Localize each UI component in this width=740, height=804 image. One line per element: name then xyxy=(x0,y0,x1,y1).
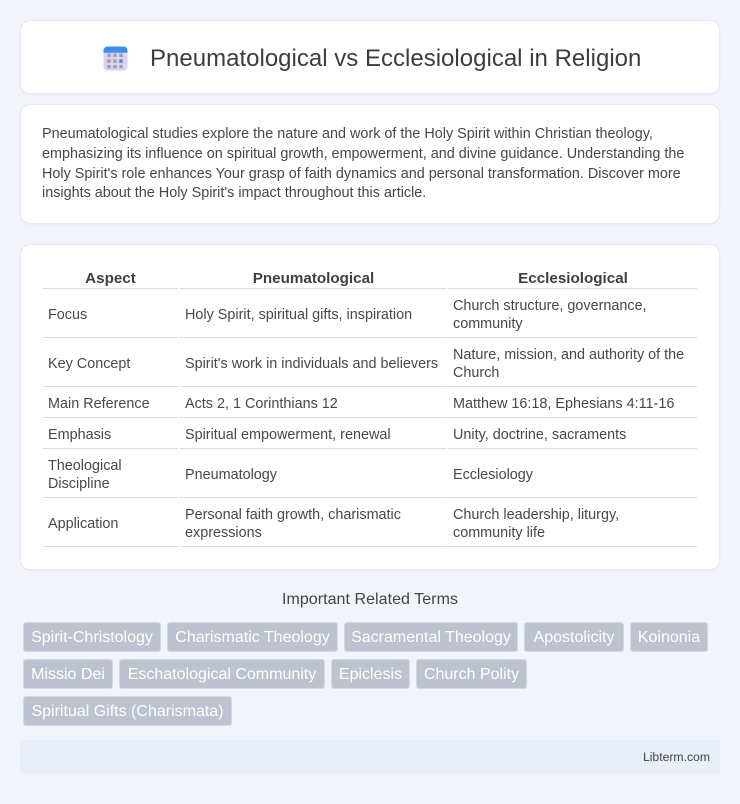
row: key concept: Nature, mission, and authority of the xyxy=(453,346,684,362)
row: application: community life xyxy=(453,525,545,541)
related terms tags: Spirit-Christology xyxy=(31,629,153,646)
row: emphasis: Emphasis xyxy=(48,426,111,442)
related terms heading: Important Related Terms xyxy=(282,591,458,608)
related terms tags: Charismatic Theology xyxy=(175,629,330,646)
row: focus: community xyxy=(453,316,523,332)
row: main reference: Acts 2, 1 Corinthians 12 xyxy=(185,396,338,412)
related terms tags xyxy=(23,622,708,726)
table header xyxy=(85,270,628,287)
related terms tags: Spiritual Gifts (Charismata) xyxy=(31,703,224,720)
row: emphasis: Spiritual empowerment, renewal xyxy=(185,426,391,442)
header panel xyxy=(20,20,720,94)
related terms tags: Epiclesis xyxy=(339,666,402,683)
row: main reference xyxy=(48,396,674,412)
row: main reference: Main Reference xyxy=(48,396,150,412)
table header: Ecclesiological xyxy=(518,270,628,287)
related terms tags: Koinonia xyxy=(638,629,700,646)
icon: calendar xyxy=(104,46,128,70)
panel: introduction xyxy=(20,104,720,224)
related terms tags: Eschatological Community xyxy=(128,666,316,683)
related terms tags: Missio Dei xyxy=(31,666,105,683)
row: emphasis xyxy=(48,426,626,442)
related terms tags: Church Polity xyxy=(424,666,519,683)
intro text: Pneumatological studies explore the nature and work of the Holy Spirit within Christian theology, xyxy=(42,126,653,142)
row: main reference: Matthew 16:18, Ephesians 4:11-16 xyxy=(453,396,674,412)
row: application: expressions xyxy=(185,525,262,541)
row: key concept: Key Concept xyxy=(48,356,130,372)
row: theological discipline: Discipline xyxy=(48,476,110,492)
title: Pneumatological vs Ecclesiological in Religion xyxy=(150,45,641,72)
footer credit: Libterm.com xyxy=(643,750,710,764)
table header: Pneumatological xyxy=(253,270,374,287)
intro text: Holy Spirit's role enhances Your grasp of faith dynamics and personal transformation. Discover more xyxy=(42,166,681,182)
intro text: emphasizing its influence on spiritual growth, empowerment, and divine guidance. Understanding the xyxy=(42,146,684,162)
row: application xyxy=(48,506,619,541)
row: theological discipline: Theological xyxy=(48,458,122,474)
row: application: Application xyxy=(48,516,118,532)
row: application: Church leadership, liturgy, xyxy=(453,506,619,522)
row: application: Personal faith growth, charismatic xyxy=(185,506,401,522)
related terms tags: Apostolicity xyxy=(534,629,614,646)
table header: Aspect xyxy=(85,270,136,287)
footer xyxy=(20,740,720,774)
row: focus: Holy Spirit, spiritual gifts, inspiration xyxy=(185,306,412,322)
intro text: insights about the Holy Spirit's impact throughout this article. xyxy=(42,185,426,201)
row: key concept: Church xyxy=(453,365,499,381)
row: key concept: Spirit's work in individuals and believers xyxy=(185,356,438,372)
row: emphasis: Unity, doctrine, sacraments xyxy=(453,426,626,442)
row: theological discipline: Pneumatology xyxy=(185,466,277,482)
row: focus: Focus xyxy=(48,306,87,322)
row: theological discipline xyxy=(48,458,533,492)
panel: comparison table xyxy=(20,244,720,570)
related terms tags: Sacramental Theology xyxy=(351,629,511,646)
row: focus xyxy=(48,298,647,332)
row: theological discipline: Ecclesiology xyxy=(453,466,533,482)
intro text xyxy=(42,126,684,201)
row: key concept xyxy=(48,346,684,381)
row: focus: Church structure, governance, xyxy=(453,298,647,314)
